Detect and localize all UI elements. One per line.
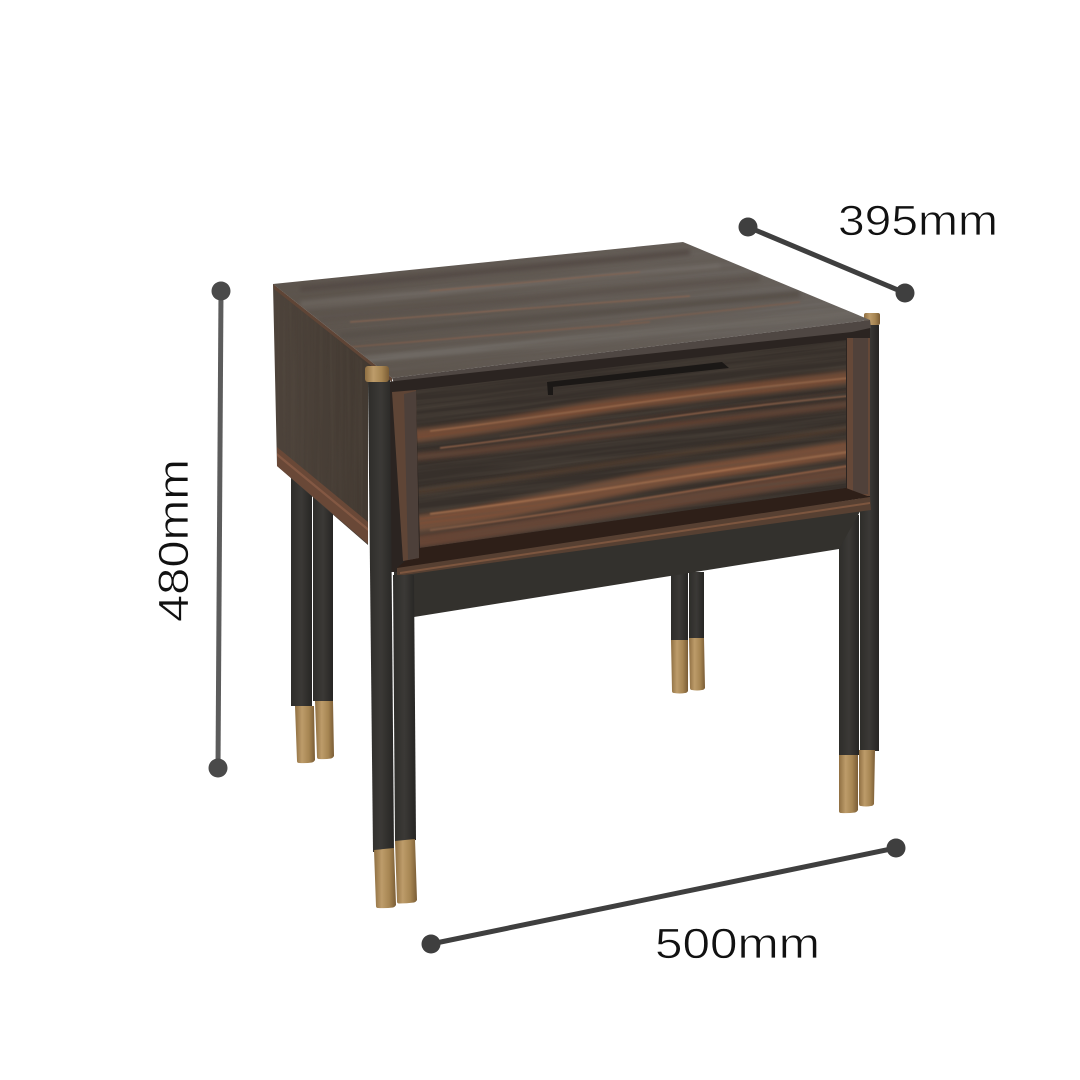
label: 480mm: 480mm [150, 459, 198, 622]
back left brass feet [295, 701, 334, 763]
drawer front [416, 340, 846, 548]
right post of drawer frame [847, 338, 870, 496]
front left brass feet [374, 839, 417, 908]
side top veneer edge [273, 284, 392, 382]
label: 395mm: 395mm [838, 197, 998, 245]
dimension: width 500mm [422, 838, 906, 968]
back centre brass feet [671, 638, 705, 694]
top wood grain [301, 244, 864, 363]
drawer handle [547, 362, 729, 395]
front right leg [839, 515, 859, 813]
apron under shelf [394, 508, 862, 640]
table top [273, 242, 871, 382]
back right leg [859, 313, 880, 806]
side bottom veneer strip [277, 447, 368, 544]
drawer wood grain [416, 357, 846, 548]
brass foot front right [839, 755, 858, 813]
back centre legs [671, 572, 705, 694]
infographic: bedside table with dimensions [158, 206, 994, 958]
side panel grain [270, 280, 370, 530]
side panel [270, 280, 392, 545]
shelf below drawer [397, 488, 871, 576]
brass foot back right [859, 750, 875, 806]
label: 500mm: 500mm [655, 920, 820, 968]
top front edge [392, 320, 871, 388]
left post of drawer frame [392, 390, 419, 561]
brass cap front left [365, 366, 389, 382]
drawer recess frame [386, 328, 870, 572]
brass cap back right [864, 313, 880, 325]
front left legs [365, 366, 417, 908]
back left legs [291, 470, 334, 763]
dimension: depth 395mm [738, 197, 998, 302]
dimension: height 480mm [150, 282, 230, 778]
